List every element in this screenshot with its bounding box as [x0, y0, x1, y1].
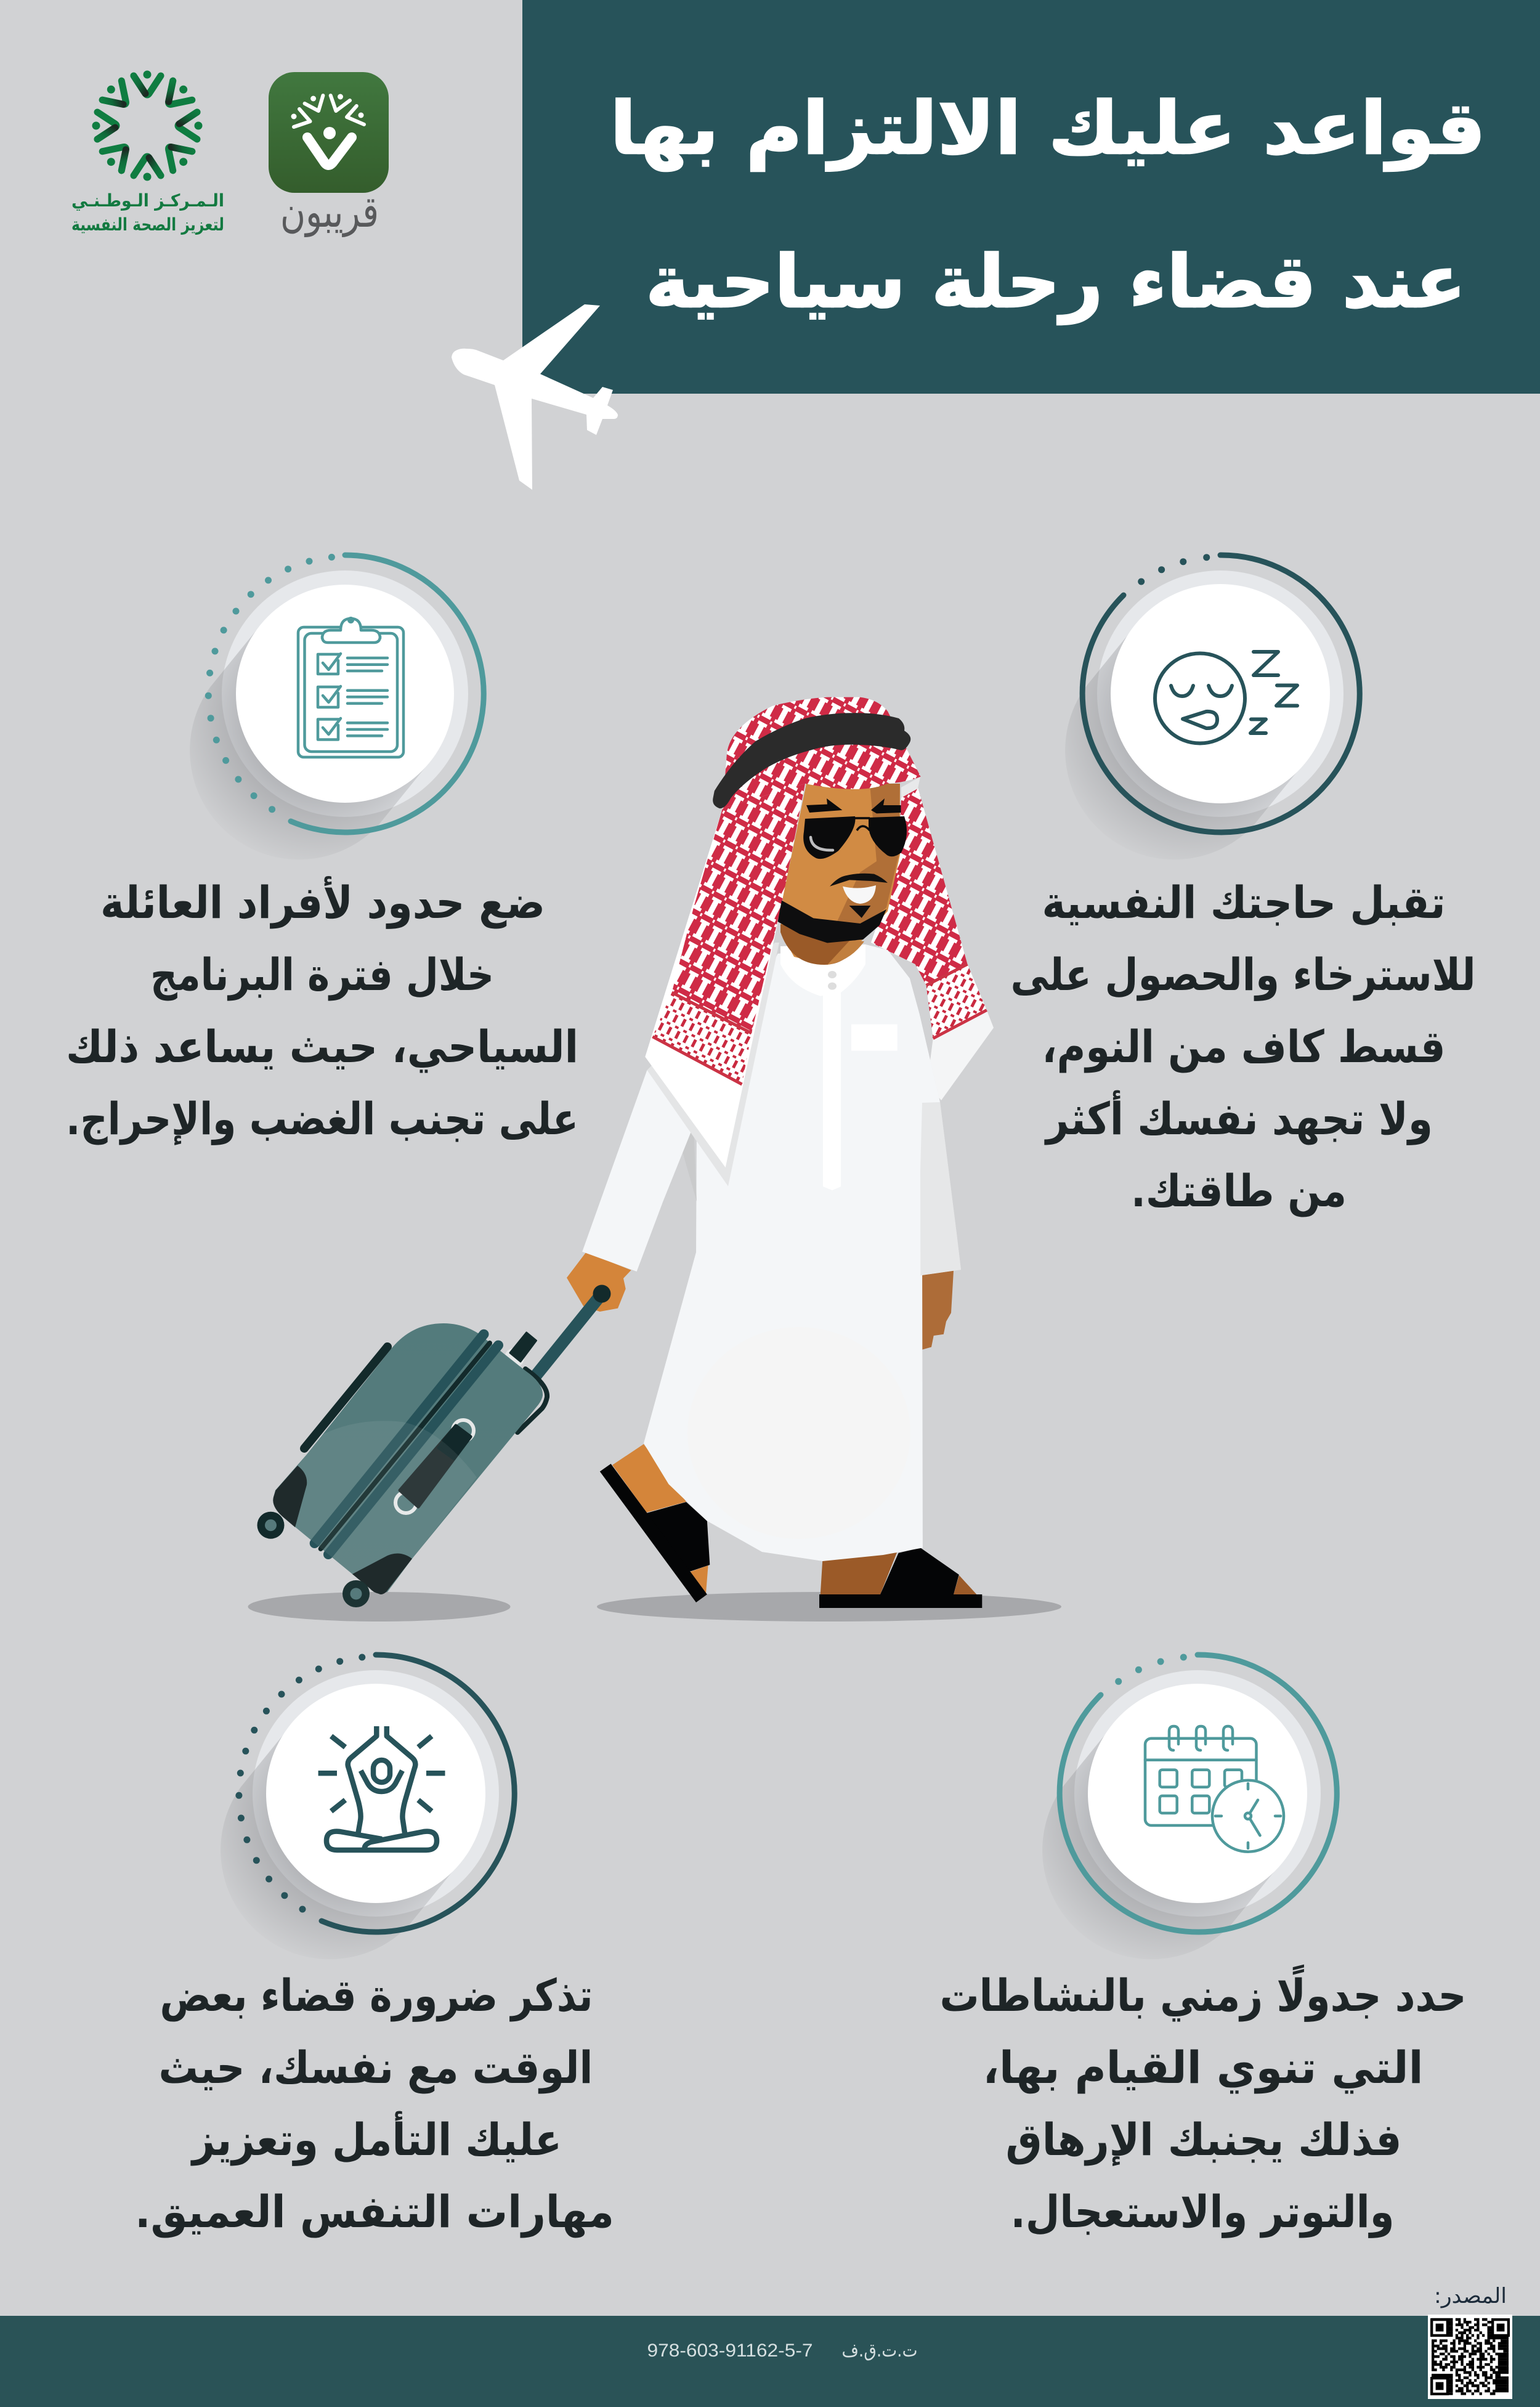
circle badge: checklist — [190, 554, 484, 859]
rest text: للاسترخاء والحصول على — [1010, 949, 1476, 1001]
footer band — [0, 2316, 1540, 2407]
suitcase grip — [400, 1426, 471, 1507]
family boundaries text: ضع حدود لأفراد العائلة — [100, 875, 545, 929]
meditation text: مهارات التنفس العميق. — [135, 2186, 614, 2238]
keffiyeh: left panel — [645, 784, 805, 1187]
meditation text — [135, 1970, 614, 2238]
icon: calendar and clock — [1145, 1726, 1284, 1852]
thobe: right sleeve — [888, 950, 961, 1275]
circle badge: meditation — [221, 1654, 514, 1959]
right hand — [922, 1270, 954, 1350]
logo: qareeboon app — [269, 72, 389, 237]
rest text: تقبل حاجتك النفسية — [1042, 877, 1445, 928]
schedule text: والتوتر والاستعجال. — [1010, 2186, 1395, 2238]
meditation text: تذكر ضرورة قضاء بعض — [160, 1970, 593, 2022]
keffiyeh: crown and agal — [713, 697, 921, 808]
left leg and sandal — [600, 1444, 710, 1602]
family boundaries text: السياحي، حيث يساعد ذلك — [66, 1021, 578, 1073]
isbn text: 978-603-91162-5-7 — [647, 2340, 813, 2361]
thobe: left sleeve — [582, 1070, 699, 1272]
isbn text: ت.ت.ق.ف — [841, 2340, 918, 2361]
suitcase corner guards — [273, 1466, 412, 1594]
icon: meditating person — [318, 1726, 445, 1850]
panel: schedule tip — [940, 1654, 1466, 2238]
sunglasses — [803, 816, 907, 859]
suitcase latch — [505, 1333, 536, 1368]
left hand — [567, 1252, 631, 1312]
ground shadows — [248, 1592, 1061, 1622]
rest text: قسط كاف من النوم، — [1042, 1021, 1445, 1073]
isbn text — [647, 2340, 918, 2361]
family boundaries text: على تجنب الغضب والإحراج. — [66, 1093, 578, 1145]
beard — [777, 901, 886, 943]
keffiyeh: right panel — [871, 787, 994, 1100]
suitcase wheels — [257, 1512, 370, 1607]
panel: meditation tip — [135, 1654, 614, 2238]
logo: national center for mental health — [71, 70, 224, 235]
logo text: لتعزيز الصحة النفسية — [71, 214, 224, 235]
thobe: collar, placket and pocket — [780, 944, 898, 1190]
logo mark: star of people — [92, 70, 202, 181]
schedule text: حدد جدولًا زمني بالنشاطات — [940, 1964, 1466, 2022]
circle badge: calendar — [1042, 1654, 1337, 1959]
mouth and moustache — [830, 874, 888, 904]
suitcase edge strips — [304, 1347, 547, 1448]
suitcase trim — [315, 1334, 498, 1554]
meditation text: عليك التأمل وتعزيز — [190, 2111, 562, 2166]
logo text — [71, 190, 224, 235]
header panel — [522, 0, 1540, 394]
title: عند قضاء رحلة سياحية — [646, 239, 1466, 325]
family boundaries text: خلال فترة البرنامج — [150, 949, 494, 1001]
qr code — [1428, 2315, 1512, 2399]
family boundaries text — [66, 875, 578, 1145]
logo text: الـمـركـز الـوطـنـي — [71, 190, 224, 211]
suitcase — [257, 1285, 611, 1607]
suitcase shell — [273, 1323, 543, 1594]
panel: family boundaries tip — [66, 554, 578, 1145]
title — [610, 86, 1486, 325]
eyebrows — [806, 798, 901, 813]
icon: airplane — [452, 304, 618, 490]
app icon — [269, 72, 389, 193]
face and neck — [777, 784, 907, 965]
schedule text — [940, 1964, 1466, 2238]
schedule text: التي تنوي القيام بها، — [983, 2042, 1423, 2094]
illustration: man with suitcase — [248, 697, 1061, 1622]
suitcase lower highlight — [274, 1421, 477, 1592]
meditation text: الوقت مع نفسك، حيث — [159, 2042, 593, 2094]
panel: rest tip — [1010, 554, 1476, 1217]
rest text: ولا تجهد نفسك أكثر — [1044, 1090, 1433, 1145]
rest text: من طاقتك. — [1131, 1165, 1347, 1217]
thobe: body — [644, 944, 961, 1561]
app name: قريبون — [280, 187, 379, 237]
icon: clipboard checklist — [298, 617, 403, 757]
icon: sleeping face — [1155, 652, 1297, 743]
rest text — [1010, 877, 1476, 1217]
circle badge: sleep — [1065, 554, 1360, 859]
source label: المصدر: — [1434, 2284, 1507, 2308]
title: قواعد عليك الالتزام بها — [610, 86, 1486, 171]
schedule text: فذلك يجنبك الإرهاق — [1005, 2114, 1402, 2166]
suitcase handle — [536, 1285, 611, 1375]
right leg and sandal — [819, 1548, 982, 1608]
